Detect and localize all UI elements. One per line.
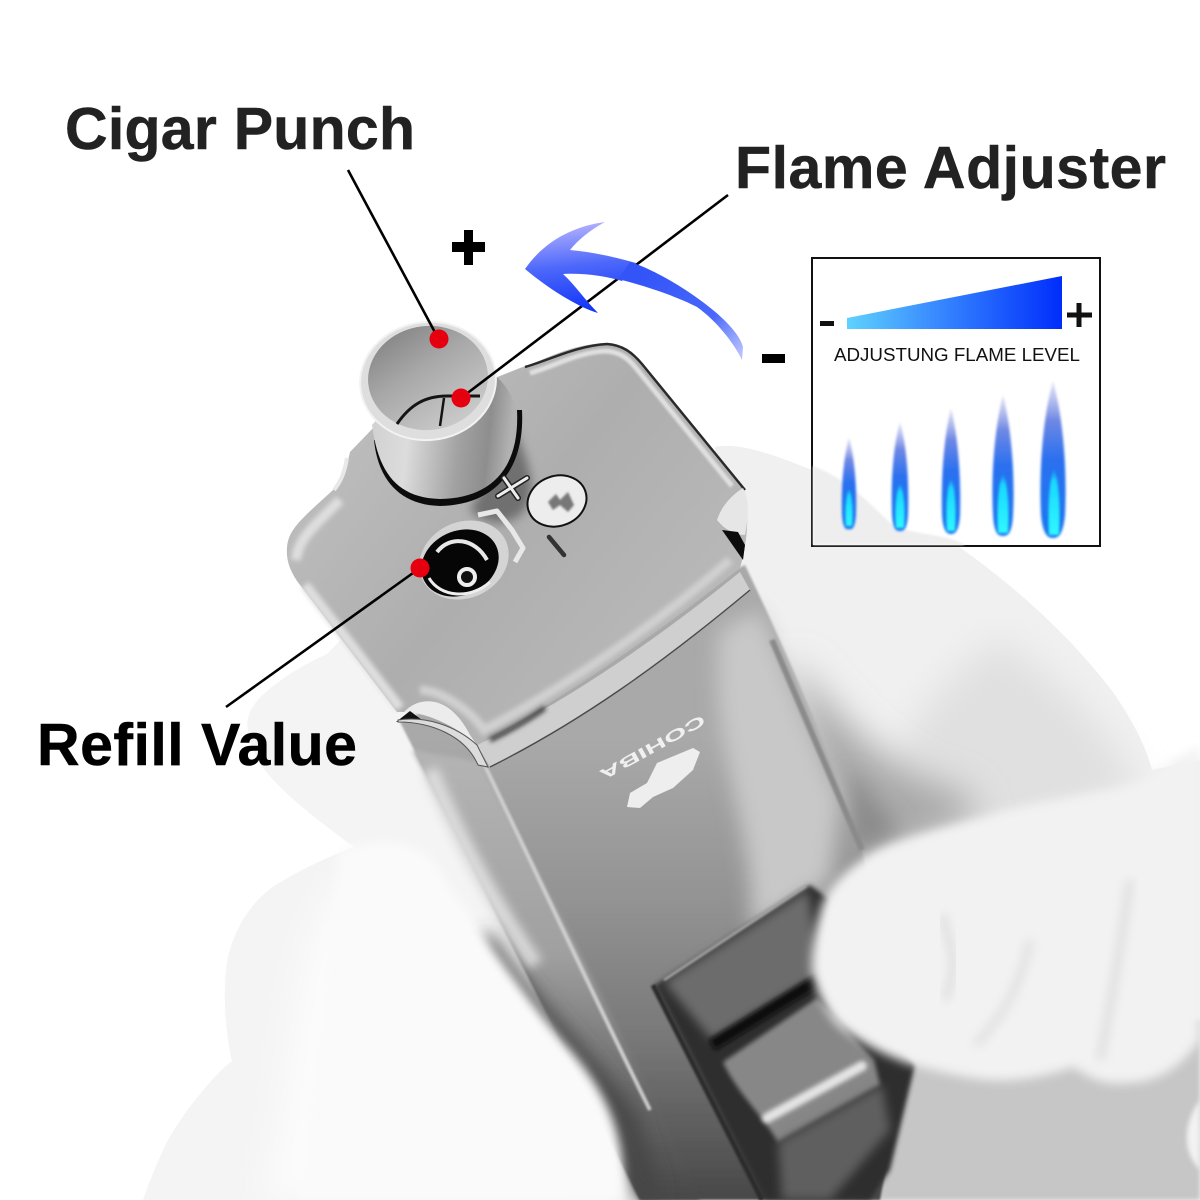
- inset frame: [812, 258, 1100, 546]
- leader line: Flame Adjuster: [461, 195, 728, 398]
- engraved minus mark: [549, 537, 564, 555]
- punch outer wall: [372, 359, 517, 499]
- plate lower light band: [420, 560, 730, 730]
- thumb crease 2: [975, 940, 1030, 1045]
- valve lower arc: [429, 578, 490, 594]
- cohiba logo: [596, 711, 708, 808]
- plus light b: [498, 478, 527, 496]
- plate left shoulder: [334, 458, 347, 490]
- leader line: Cigar Punch: [348, 170, 438, 338]
- gradient wedge: [847, 276, 1062, 329]
- plate top edge dark: [525, 344, 745, 490]
- logo text: COHIBA: [596, 711, 708, 783]
- plus stroke b: [498, 478, 527, 496]
- refill valve: [406, 506, 522, 614]
- slider highlight: [767, 1066, 862, 1118]
- hand: back palm: [700, 446, 1200, 1200]
- flame 4: [992, 395, 1014, 536]
- thumb crease 3: [1100, 880, 1130, 1060]
- thumb crease 1: [943, 915, 953, 1000]
- plate cylinder shadow: [470, 430, 531, 523]
- slider recess edge highlight: [664, 886, 806, 980]
- valve collar: [406, 506, 522, 614]
- plate shadow crease: [490, 708, 545, 740]
- slider cut line: [653, 985, 762, 1200]
- slider button: [723, 998, 880, 1142]
- punch inner floor crack: [397, 396, 480, 426]
- panel: flame level inset: [812, 258, 1100, 546]
- hand showing through inset: [813, 466, 965, 545]
- logo fish: [627, 748, 700, 808]
- floor arc: [397, 396, 480, 424]
- inset caption: ADJUSTUNG FLAME LEVEL: [834, 345, 1080, 365]
- arrow tail: [618, 262, 743, 360]
- heading: Refill Value: Refill Value: [37, 712, 357, 778]
- plate corner left notch: [396, 711, 422, 722]
- plus sign: [452, 230, 485, 265]
- flame 2: [892, 422, 908, 531]
- flame 3: [942, 408, 960, 534]
- valve pin: [459, 569, 475, 585]
- slider button lower: [778, 1085, 890, 1200]
- second finger at edge: [1187, 1100, 1200, 1170]
- right panel highlight: [717, 610, 840, 935]
- screw slot: [548, 492, 574, 512]
- leader line: Refill Value: [226, 568, 420, 707]
- punch inner hole: [363, 320, 493, 436]
- top plate: [287, 343, 747, 745]
- plate corner right: [717, 488, 748, 535]
- heading: Cigar Punch: Cigar Punch: [65, 96, 415, 162]
- plus light a: [504, 478, 518, 498]
- left bevel strip: [412, 750, 700, 1200]
- punch base shadow: [374, 410, 522, 506]
- wedge minus: [820, 321, 834, 326]
- adjusting screw: [520, 467, 594, 535]
- collar dark line: [490, 590, 750, 767]
- hand: left fingers: [143, 630, 640, 1200]
- minus sign: [762, 354, 785, 363]
- valve arc highlight: [437, 541, 487, 560]
- flame 5: [1040, 381, 1066, 538]
- hand: right thumb: [812, 747, 1200, 1170]
- slider recess: [655, 885, 915, 1200]
- collar band: [477, 572, 750, 767]
- hand: front finger over body: [300, 842, 623, 1200]
- plus stroke a: [504, 478, 518, 498]
- chrome bevel below hump: [398, 719, 488, 767]
- lighter lower body: [400, 565, 905, 1200]
- floor split: [440, 398, 444, 426]
- left bevel highlight: [484, 764, 650, 1110]
- slider dark shadow: [712, 980, 818, 1045]
- plate top edge light: [530, 351, 732, 486]
- valve outer ring: [410, 517, 510, 609]
- engraved plus mark: [498, 478, 527, 498]
- plate left rim light: [296, 500, 400, 708]
- marker: cigar punch: [430, 330, 448, 348]
- heading: Flame Adjuster: Flame Adjuster: [735, 135, 1166, 201]
- thumb shape: [812, 747, 1200, 1083]
- wedge plus: [1067, 303, 1092, 327]
- flame 1: [842, 437, 856, 529]
- left bevel bright band: [430, 770, 535, 965]
- screw rim: [520, 467, 594, 535]
- plate corner black wedge: [722, 530, 745, 560]
- hand: lower right backdrop: [860, 1020, 1200, 1200]
- plate corner left hump: [404, 701, 477, 745]
- arrow: adjust direction: [525, 222, 743, 360]
- marker: flame adjuster: [452, 388, 470, 408]
- refill valve bracket: [478, 511, 523, 562]
- shadow along finger: [480, 940, 650, 1200]
- right edge stripe: [772, 640, 862, 850]
- slider recess upper face: [664, 890, 820, 1040]
- marker: refill valve: [410, 558, 430, 578]
- lighter body: [287, 343, 915, 1200]
- cigar punch cylinder: [354, 315, 522, 506]
- punch rim: [354, 315, 502, 447]
- arrow head: [525, 222, 636, 313]
